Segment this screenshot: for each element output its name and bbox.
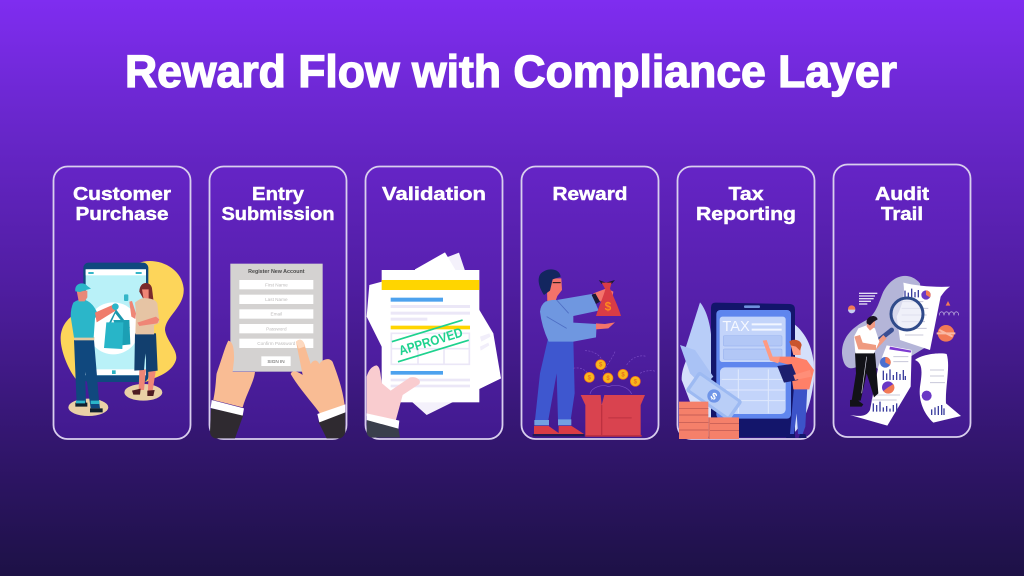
heading: customer purchase: Customer [73, 184, 171, 204]
panel: validation [366, 166, 502, 439]
illustration: registration form held in hands: Password [266, 326, 287, 331]
illustration: tablet with tax form: TAX [722, 319, 750, 335]
illustration: approved documents [367, 252, 501, 438]
heading: reward: Reward [552, 184, 628, 204]
panel: reward [522, 166, 658, 439]
panel: entry submission [210, 166, 346, 439]
illustration: person with money bag and treasure box [533, 269, 656, 437]
heading: entry submission: Entry [252, 184, 304, 204]
illustration: registration form held in hands: Last Name [265, 297, 288, 302]
illustration: analyst with magnifier and reports [842, 276, 961, 426]
illustration: shopper and courier at phone [61, 261, 184, 416]
illustration: person with money bag and treasure box: $ [621, 372, 625, 378]
icon: banknotes: $ [708, 391, 719, 403]
stamp: approved: APPROVED [397, 325, 465, 358]
panel: audit trail [834, 164, 970, 437]
illustration: person with money bag and treasure box: $ [606, 376, 610, 382]
heading: customer purchase: Purchase [76, 204, 168, 224]
illustration: person with money bag and treasure box: $ [588, 375, 592, 381]
panel: customer purchase [54, 166, 190, 439]
panel: tax reporting [678, 166, 814, 439]
illustration: tablet with tax form [679, 302, 814, 439]
illustration: registration form held in hands: Confirm Password [257, 341, 296, 346]
illustration: person with money bag and treasure box: $ [599, 363, 603, 369]
illustration: registration form held in hands: Register New Account [248, 269, 305, 275]
illustration: registration form held in hands: SIGN IN [267, 359, 285, 364]
illustration: registration form held in hands: Email [271, 312, 282, 317]
heading: tax reporting: Reporting [696, 204, 796, 224]
heading: tax reporting: Tax [728, 184, 764, 204]
heading: audit trail: Audit [875, 184, 929, 204]
heading: entry submission: Submission [222, 204, 334, 224]
illustration: person with money bag and treasure box: $ [634, 379, 638, 385]
illustration: person with money bag and treasure box: $ [605, 300, 612, 314]
title: Reward Flow with Compliance Layer [125, 46, 897, 97]
heading: audit trail: Trail [881, 204, 923, 224]
illustration: registration form held in hands: First Name [265, 282, 288, 287]
illustration: registration form held in hands [210, 264, 345, 438]
heading: validation: Validation [382, 184, 486, 204]
